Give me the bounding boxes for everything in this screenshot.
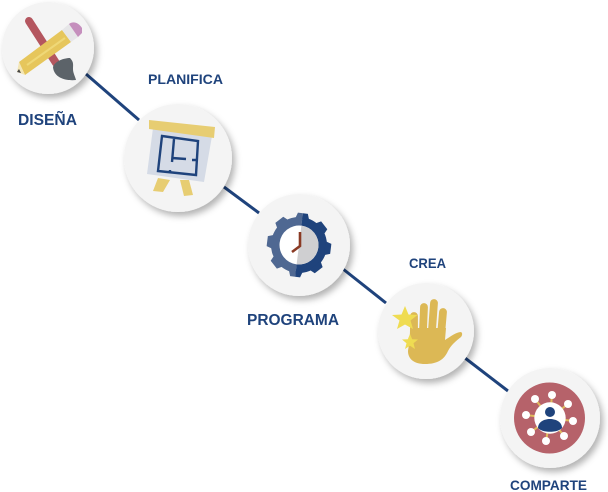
icon: shared network [514, 382, 585, 454]
icon: hand with stars [392, 303, 462, 364]
icon: blueprint on easel [147, 120, 215, 196]
label: programa: PROGRAMA [247, 312, 339, 329]
connector lines [86, 74, 508, 391]
step: planifica [124, 71, 232, 212]
label: planifica: PLANIFICA [148, 71, 223, 87]
step: comparte [500, 368, 600, 492]
label: diseña: DISEÑA [18, 111, 77, 129]
label: crea: CREA [409, 255, 446, 271]
icon: gear with clock [266, 212, 332, 278]
step: programa [247, 194, 350, 329]
icon: pencil and brush [17, 21, 82, 80]
step: crea [378, 255, 474, 379]
step: diseña [2, 2, 94, 129]
